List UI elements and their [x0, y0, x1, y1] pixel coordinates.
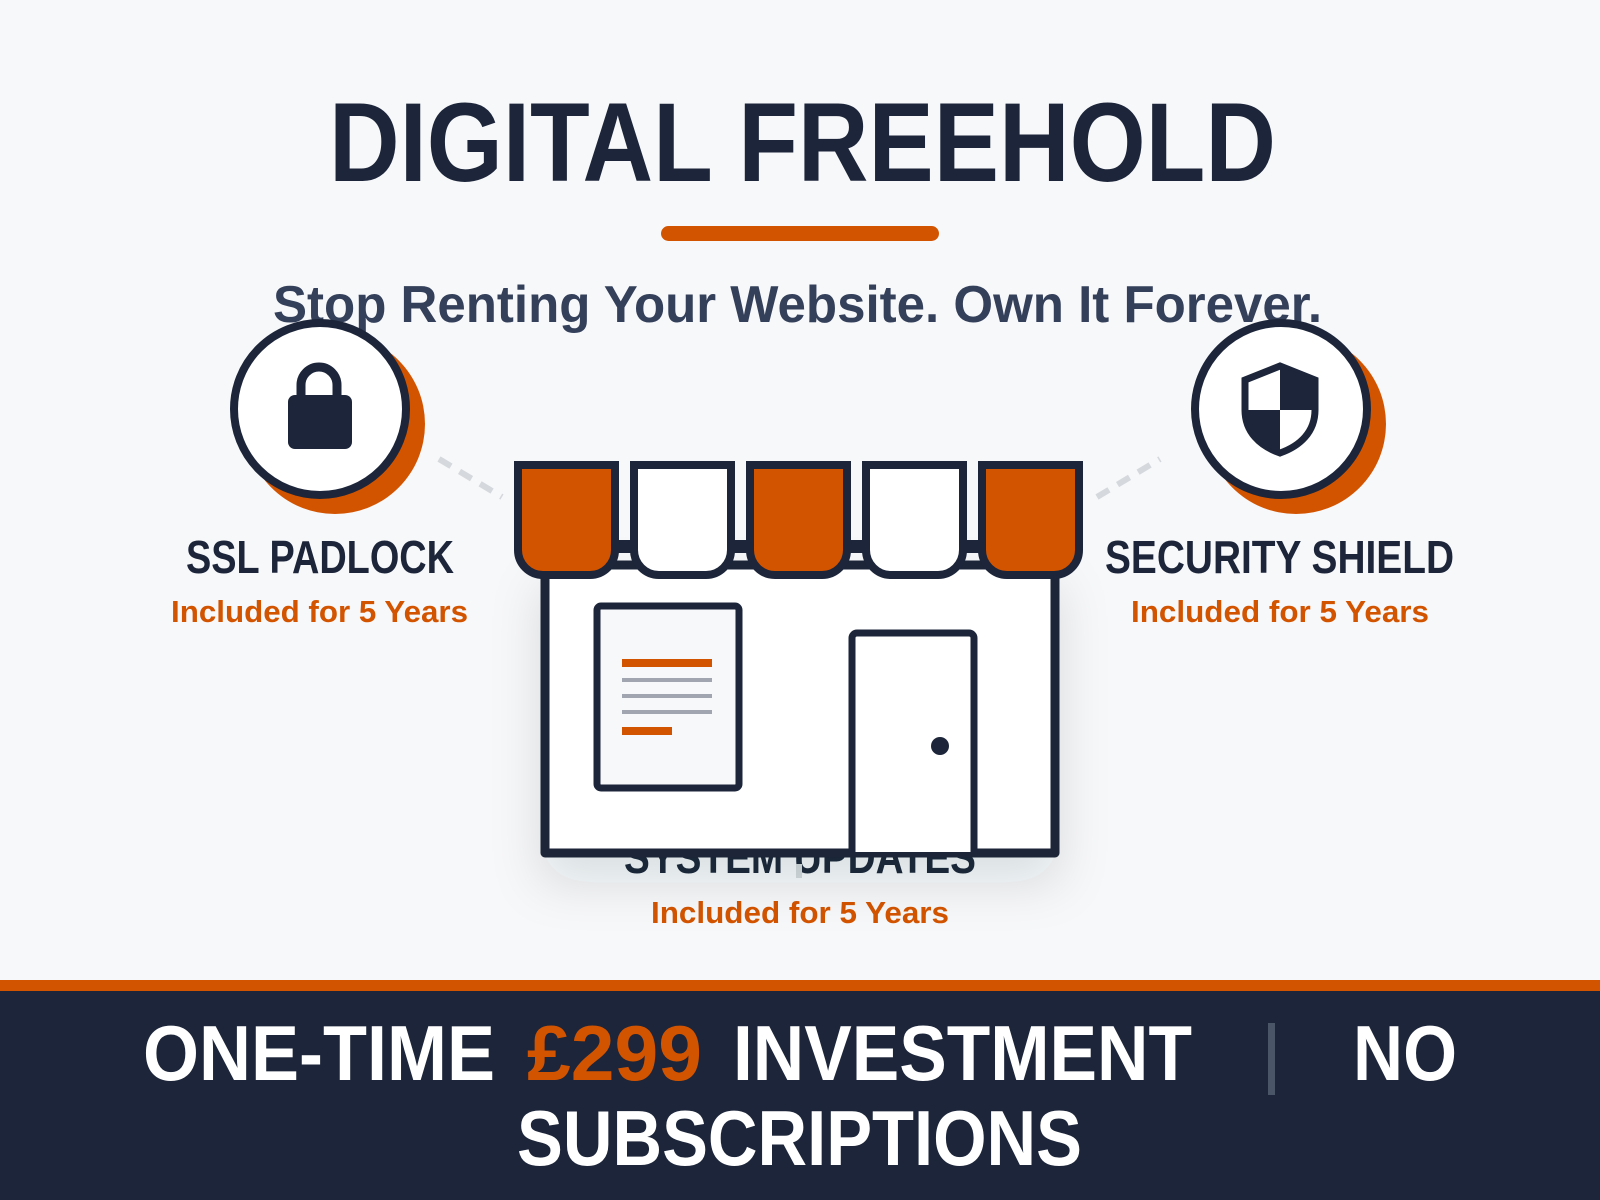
title underline — [661, 226, 939, 241]
icon: shield badge — [1195, 323, 1386, 514]
label: security shield: Included for 5 Years — [1131, 594, 1429, 629]
title: DIGITAL FREEHOLD — [329, 80, 1276, 205]
label: SSL padlock: SSL PADLOCK — [186, 531, 454, 583]
door — [852, 633, 974, 852]
window with menu — [597, 606, 739, 788]
storefront illustration — [518, 465, 1080, 853]
connector: right dashed — [1097, 459, 1160, 497]
footer band: ONE-TIME — [143, 1009, 495, 1097]
footer band: £299 — [527, 1009, 702, 1097]
footer band: INVESTMENT — [733, 1009, 1192, 1097]
label: system updates: SYSTEM UPDATES — [624, 831, 976, 883]
footer band: NO — [1353, 1009, 1457, 1097]
awning bar — [520, 540, 1080, 553]
label: system updates: Included for 5 Years — [651, 895, 949, 930]
label: security shield: SECURITY SHIELD — [1105, 531, 1454, 583]
store body — [545, 565, 1055, 853]
footer band: SUBSCRIPTIONS — [517, 1094, 1082, 1182]
connector: left dashed — [439, 459, 502, 497]
footer band — [0, 980, 1600, 1200]
label: SSL padlock — [171, 531, 468, 629]
icon: padlock badge — [234, 323, 425, 514]
awning scallops — [518, 465, 1079, 575]
label: system updates — [624, 831, 976, 930]
label: SSL padlock: Included for 5 Years — [171, 594, 468, 629]
subtitle: Stop Renting Your Website. Own It Forever. — [273, 276, 1322, 334]
label: security shield — [1105, 531, 1454, 629]
